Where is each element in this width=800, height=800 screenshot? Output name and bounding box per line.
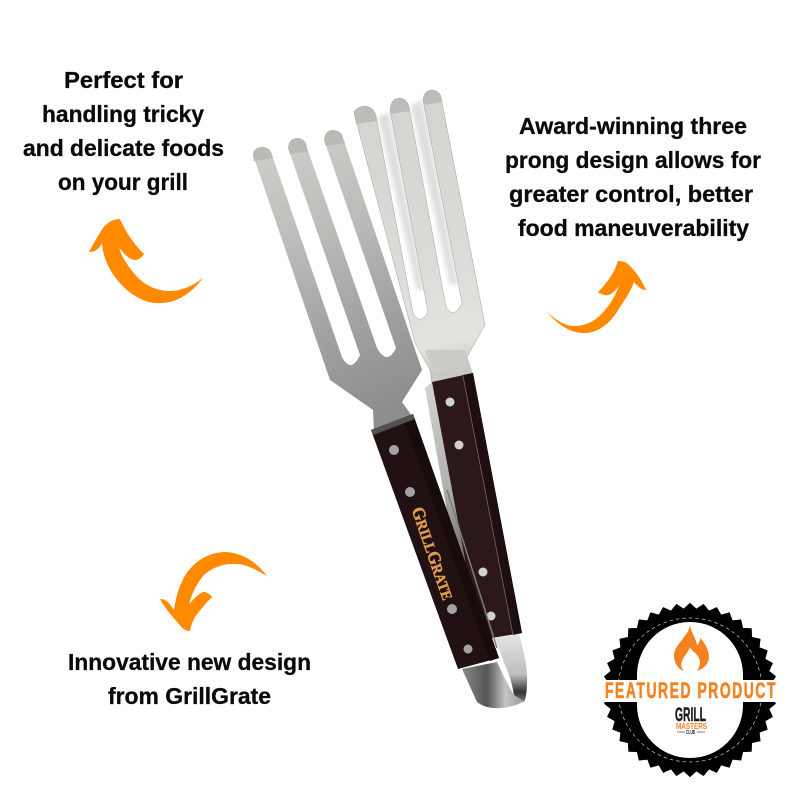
- text: innovative new design: Innovative new design: [68, 649, 311, 675]
- text: perfect for handling tricky foods: [23, 67, 224, 195]
- arrow: lower left, pointing to text: [160, 552, 267, 631]
- badge logo: grill masters club: [675, 705, 707, 736]
- badge: featured product: [598, 604, 782, 776]
- badge logo: grill masters club: MASTERS: [676, 721, 707, 731]
- text: perfect for handling tricky foods: on your grill: [58, 169, 188, 195]
- text: innovative new design: from GrillGrate: [108, 683, 271, 709]
- badge logo: grill masters club: CLUB: [686, 730, 695, 736]
- left handle: [371, 414, 499, 669]
- left fork blade: [253, 130, 422, 432]
- text: perfect for handling tricky foods: and delicate foods: [23, 135, 224, 161]
- steel strip between handles: [425, 382, 482, 640]
- badge flame: [674, 624, 709, 671]
- badge white centre: [637, 622, 743, 758]
- badge stitching: [618, 618, 762, 762]
- tongs: right fork: [354, 90, 522, 640]
- left handle rivets: [389, 445, 472, 654]
- arrow: upper left, pointing to text: [89, 219, 203, 303]
- text: award-winning three prong design: food maneuverability: [518, 215, 749, 241]
- right fork neck shading: [425, 350, 469, 368]
- tongs: left fork: [253, 130, 499, 669]
- handle logo: GRILLGRATE: [408, 504, 458, 603]
- text: perfect for handling tricky foods: handling tricky: [42, 101, 204, 127]
- right fork blade: [354, 90, 485, 384]
- badge white band: [598, 680, 782, 702]
- badge scalloped ring: [604, 604, 776, 776]
- right handle: [432, 373, 522, 640]
- text: perfect for handling tricky foods: Perfect for: [64, 67, 183, 93]
- right fork tip shading: [354, 90, 442, 124]
- tongs: spring loop: [462, 634, 527, 708]
- text: award-winning three prong design: greater control, better: [509, 181, 753, 207]
- text: award-winning three prong design: [505, 113, 761, 241]
- text: award-winning three prong design: Award-winning three: [519, 113, 747, 139]
- right fork shadow: [378, 100, 458, 290]
- text: award-winning three prong design: prong design allows for: [505, 147, 761, 173]
- right handle rivets: [446, 398, 496, 620]
- steel edge of left handle: [447, 490, 497, 648]
- arrow: upper right, pointing to text: [547, 261, 646, 333]
- badge logo: grill masters club: GRILL: [675, 705, 706, 726]
- left fork tip shading: [253, 130, 345, 161]
- text: innovative new design: [68, 649, 311, 709]
- left handle cap: [371, 414, 415, 435]
